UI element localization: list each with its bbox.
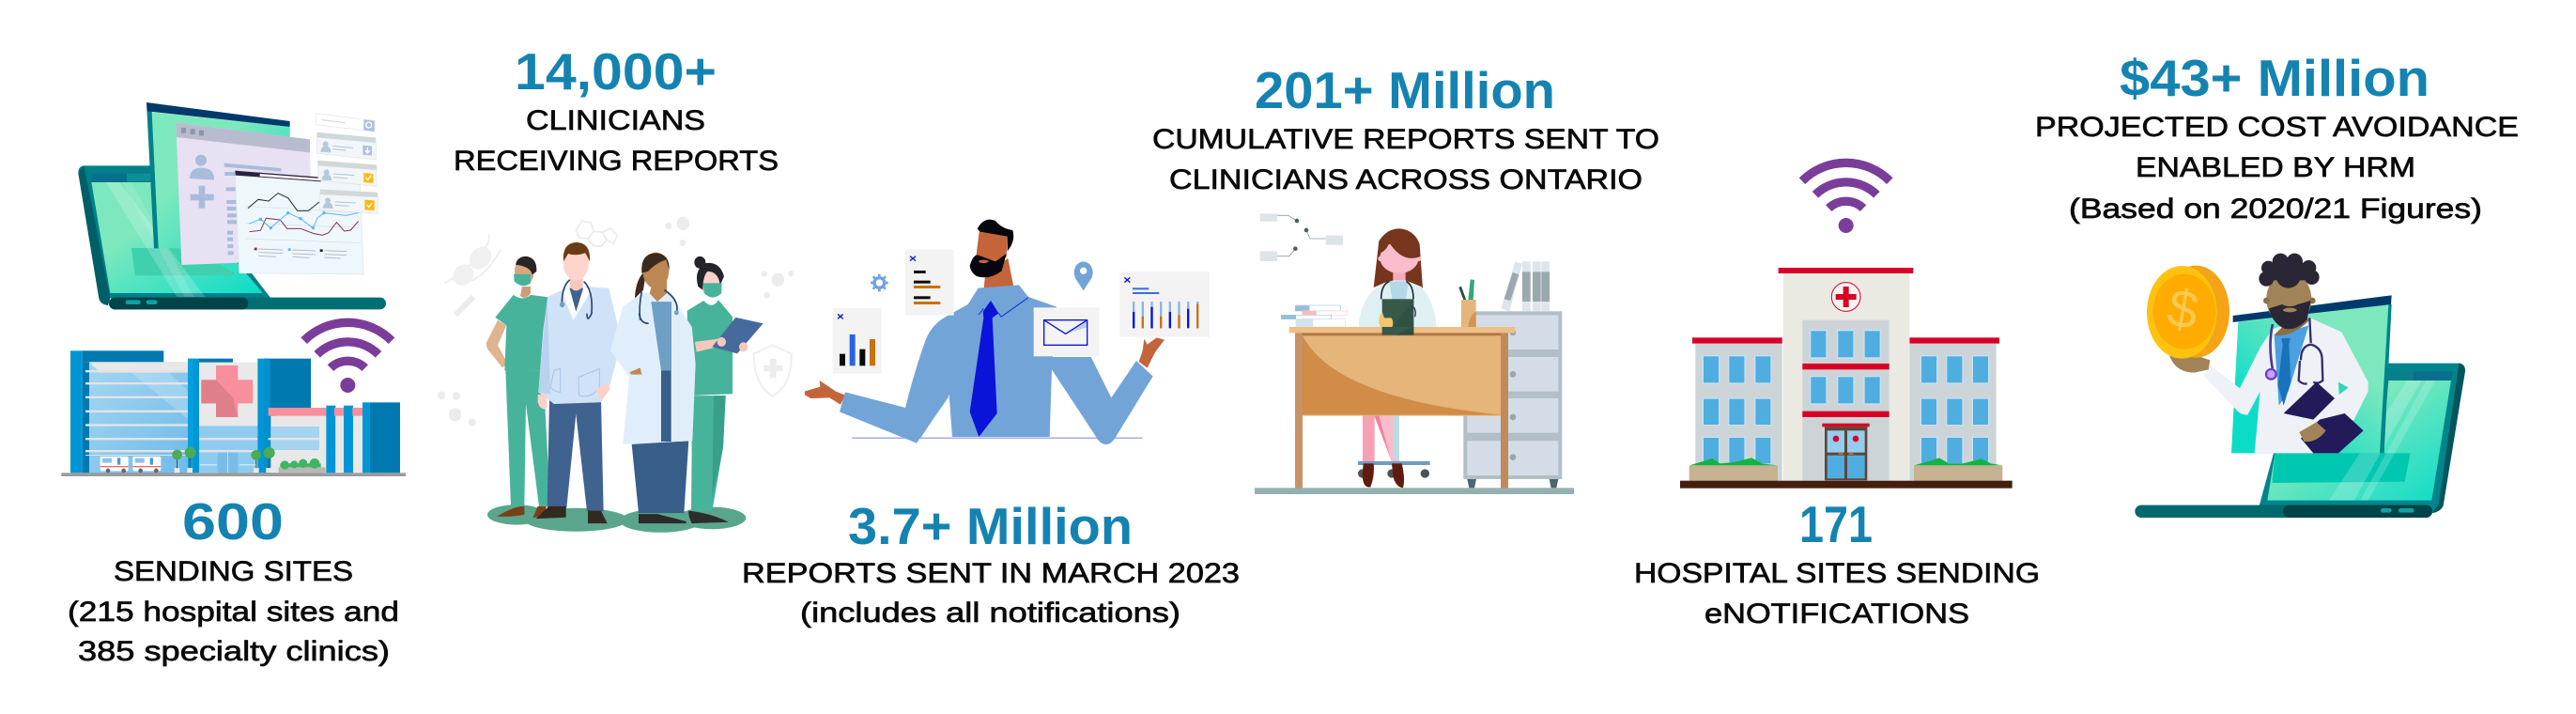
coin and hand: [2147, 266, 2229, 373]
icon: column chart card: [1119, 272, 1210, 337]
note: specialty clinics: 385 specialty clinics): [78, 636, 390, 667]
icon: gear: [871, 274, 888, 291]
right wing: [1909, 337, 1999, 480]
illustration: laptop with report windows: [78, 102, 386, 309]
panel: monthly reports: [742, 220, 1240, 629]
label: enabled by hrm: ENABLED BY HRM: [2136, 152, 2415, 183]
label: sending sites: SENDING SITES: [114, 556, 353, 587]
stat: 600: 600: [182, 492, 284, 551]
panel: sending sites: [61, 102, 406, 667]
illustration: man presenting reports: [805, 220, 1210, 444]
stat: 201+ million: 201+ Million: [1255, 61, 1555, 119]
note: includes notifications: (includes all notifications): [800, 598, 1180, 629]
clinician: [1358, 228, 1436, 488]
panel: cost avoidance: [2035, 49, 2519, 518]
filing cabinet: [1463, 261, 1562, 488]
planters: [1689, 458, 2002, 481]
illustration: hospital with wifi: [1680, 163, 2013, 489]
icon: wifi: [1802, 163, 1890, 229]
icon: location pin: [1074, 261, 1093, 290]
panel: hospital sites: [1634, 163, 2040, 629]
desk: [1289, 327, 1515, 489]
central tower: [1779, 268, 1913, 480]
icon: horizontal bars card: [905, 250, 954, 316]
figure: female doctor: [610, 253, 696, 523]
icon: envelope card: [1034, 307, 1100, 356]
video window: [2231, 295, 2392, 453]
stat: 171: 171: [1799, 495, 1873, 553]
left wing: [1692, 337, 1782, 480]
figure: male doctor: [536, 242, 618, 523]
label: clinicians: CLINICIANS: [526, 105, 705, 136]
laptop: [2135, 364, 2465, 518]
illustration: hospital with wifi: [61, 322, 406, 476]
panel: clinicians: [438, 42, 794, 533]
panel: cumulative reports: [1152, 61, 1659, 494]
illustration: team of clinicians: [438, 217, 794, 533]
note: based on figures: (Based on 2020/21 Figures): [2069, 194, 2482, 225]
label: enotifications: eNOTIFICATIONS: [1704, 598, 1969, 629]
icon: wifi: [304, 322, 392, 389]
label: cumulative reports: CUMULATIVE REPORTS SENT TO: [1152, 124, 1659, 155]
label: projected cost avoidance: PROJECTED COST AVOIDANCE: [2035, 112, 2519, 143]
label: receiving reports: RECEIVING REPORTS: [454, 146, 779, 177]
books: [1281, 305, 1348, 327]
figure: right nurse: [687, 256, 764, 523]
doctor: [2204, 254, 2368, 453]
icon: bar chart card: [833, 308, 882, 374]
figure: left nurse: [486, 256, 550, 518]
stat: 3.7+ million: 3.7+ Million: [848, 497, 1133, 555]
note: hospital sites: (215 hospital sites and: [68, 597, 399, 628]
stat: 14,000+: 14,000+: [515, 42, 717, 101]
stat: $43+ million: $43+ Million: [2120, 49, 2429, 107]
pen cup: [1458, 279, 1476, 327]
illustration: clinician at desk: [1255, 213, 1574, 494]
label: hospital sites sending: HOSPITAL SITES SENDING: [1634, 558, 2040, 589]
label: reports sent: REPORTS SENT IN MARCH 2023: [742, 558, 1240, 589]
coin and hand: $: [2163, 278, 2202, 342]
label: clinicians across ontario: CLINICIANS ACROSS ONTARIO: [1169, 164, 1643, 195]
illustration: doctor with coin and laptop: [2135, 254, 2465, 518]
